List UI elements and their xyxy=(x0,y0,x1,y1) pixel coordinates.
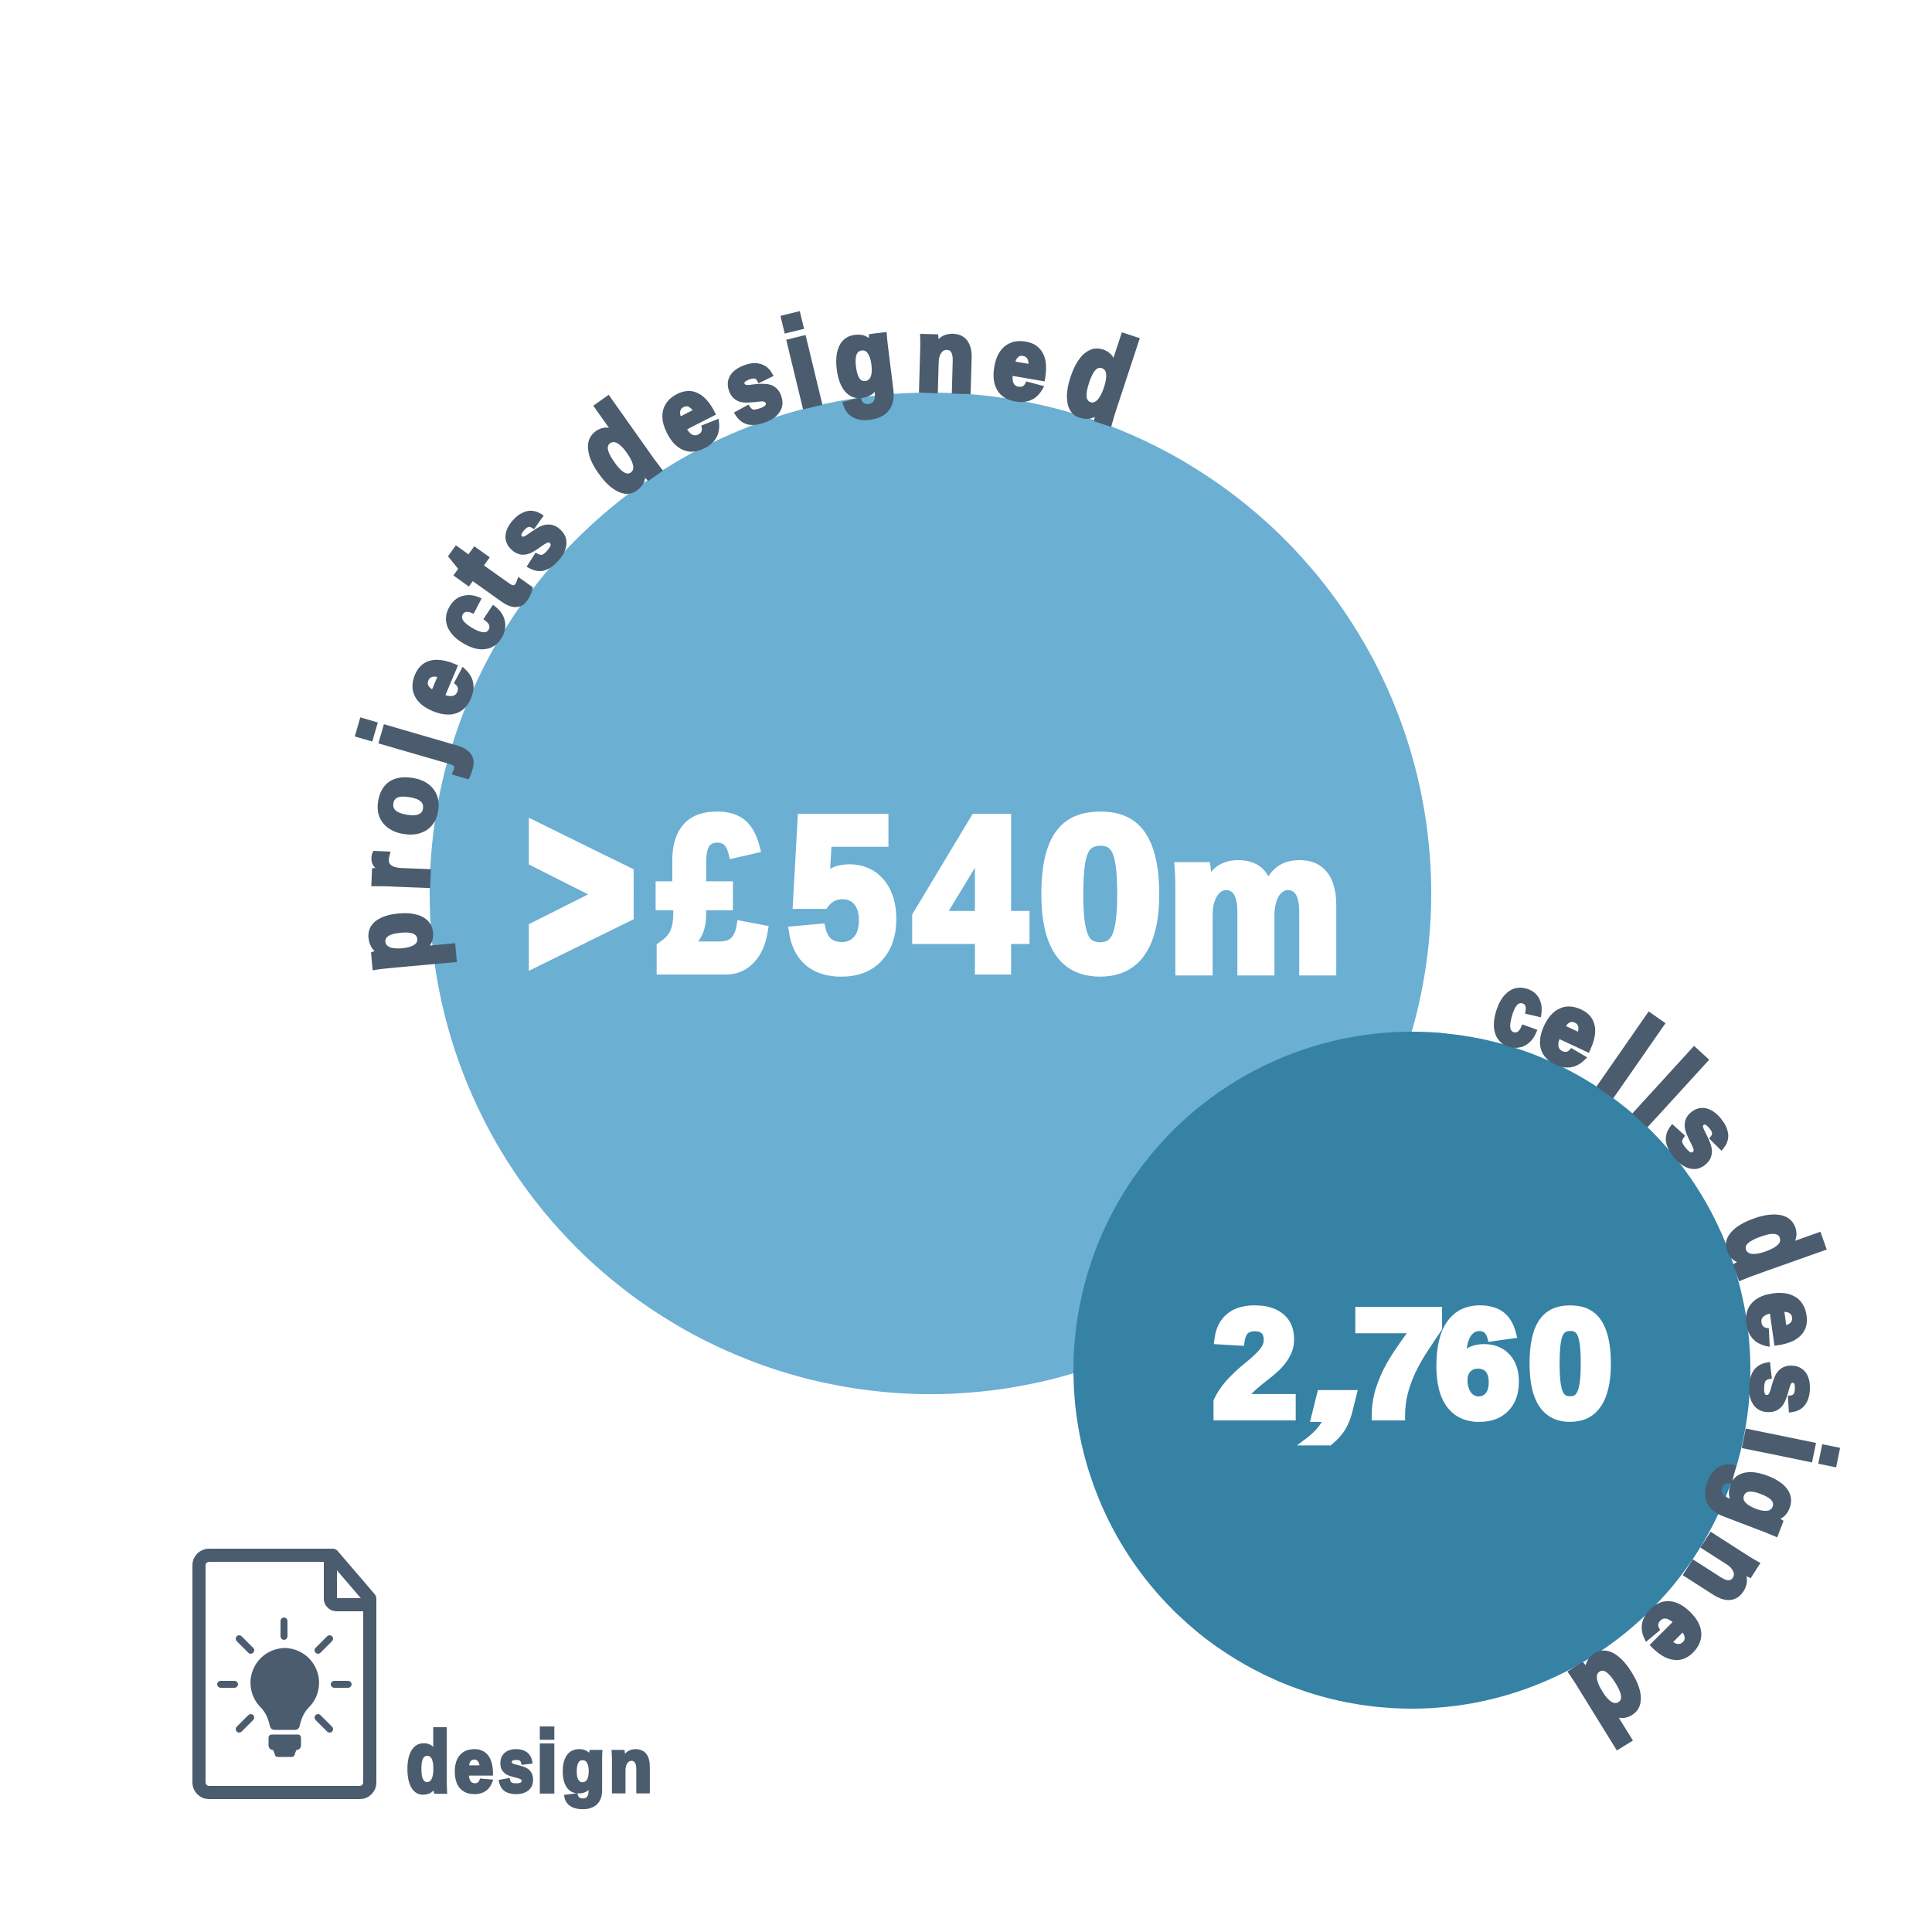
curved label: projects designed: s xyxy=(709,325,794,447)
big number: 2,760: 2 xyxy=(1213,1279,1298,1448)
big number: >£540m: > xyxy=(529,761,634,1020)
legend label: design: n xyxy=(609,1724,652,1808)
icon: light bulb xyxy=(250,1648,319,1730)
curved label: projects designed: e xyxy=(373,638,497,730)
curved label: cells designed: e xyxy=(1523,967,1619,1091)
big number: 2,760: , xyxy=(1295,1281,1393,1450)
curved label: projects designed: d xyxy=(1052,304,1149,449)
legend label: design: d xyxy=(406,1714,450,1810)
big number: >£540m: 5 xyxy=(787,772,897,1015)
curved label: projects designed: r xyxy=(336,851,450,893)
curved label: projects designed: p xyxy=(331,908,454,977)
big number: >£540m: 0 xyxy=(1038,772,1163,1015)
curved label: projects designed: s xyxy=(471,479,589,591)
big number: >£540m: 4 xyxy=(914,773,1027,1015)
curved label: projects designed: g xyxy=(827,294,900,420)
curved label: projects designed: n xyxy=(914,299,976,413)
big number: 2,760: 6 xyxy=(1435,1279,1520,1448)
curved label: projects designed: e xyxy=(637,352,736,476)
icon: bulb base xyxy=(269,1734,301,1757)
big number: >£540m: m xyxy=(1166,794,1344,1013)
legend label: design: e xyxy=(454,1724,494,1808)
curved label: projects designed: c xyxy=(407,570,529,668)
curved label: projects designed: j xyxy=(335,707,478,777)
icon: document with light bulb xyxy=(199,1555,369,1793)
curved label: cells designed: g xyxy=(1699,1457,1832,1554)
small circle: cells xyxy=(1073,1032,1750,1709)
icon: light rays xyxy=(221,1621,348,1730)
curved label: projects designed: e xyxy=(985,304,1057,423)
legend label: design: s xyxy=(498,1724,534,1808)
icon: document outline xyxy=(199,1555,369,1793)
legend label: design xyxy=(406,1714,652,1810)
big number: 2,760: 0 xyxy=(1528,1279,1613,1448)
large circle: projects xyxy=(430,393,1431,1394)
big number: 2,760 xyxy=(1213,1279,1613,1450)
big number: 2,760: 7 xyxy=(1353,1279,1444,1448)
curved label: projects designed: i xyxy=(770,291,833,434)
curved label: cells designed: c xyxy=(1481,951,1557,1070)
curved label: cells designed: e xyxy=(1726,1284,1844,1352)
curved label: projects designed: d xyxy=(553,378,679,521)
curved label: cells designed: d xyxy=(1700,1192,1845,1292)
big number: >£540m xyxy=(529,761,1344,1020)
legend label: design: g xyxy=(562,1724,605,1808)
curved label: cells designed: l xyxy=(1614,1030,1724,1146)
curved label: cells designed xyxy=(1481,951,1860,1768)
curved label: projects designed: o xyxy=(340,767,460,843)
big number: >£540m: £ xyxy=(658,773,765,1016)
legend label: design: i xyxy=(536,1715,558,1810)
curved label: projects designed: t xyxy=(419,522,552,630)
curved label: cells designed: e xyxy=(1620,1578,1736,1695)
curved label: projects designed xyxy=(331,291,1149,977)
curved label: cells designed: n xyxy=(1665,1519,1791,1628)
curved label: cells designed: d xyxy=(1553,1624,1673,1768)
curved label: cells designed: s xyxy=(1644,1077,1764,1189)
curved label: cells designed: s xyxy=(1730,1360,1845,1417)
curved label: cells designed: i xyxy=(1717,1419,1860,1476)
curved label: cells designed: l xyxy=(1580,995,1679,1119)
